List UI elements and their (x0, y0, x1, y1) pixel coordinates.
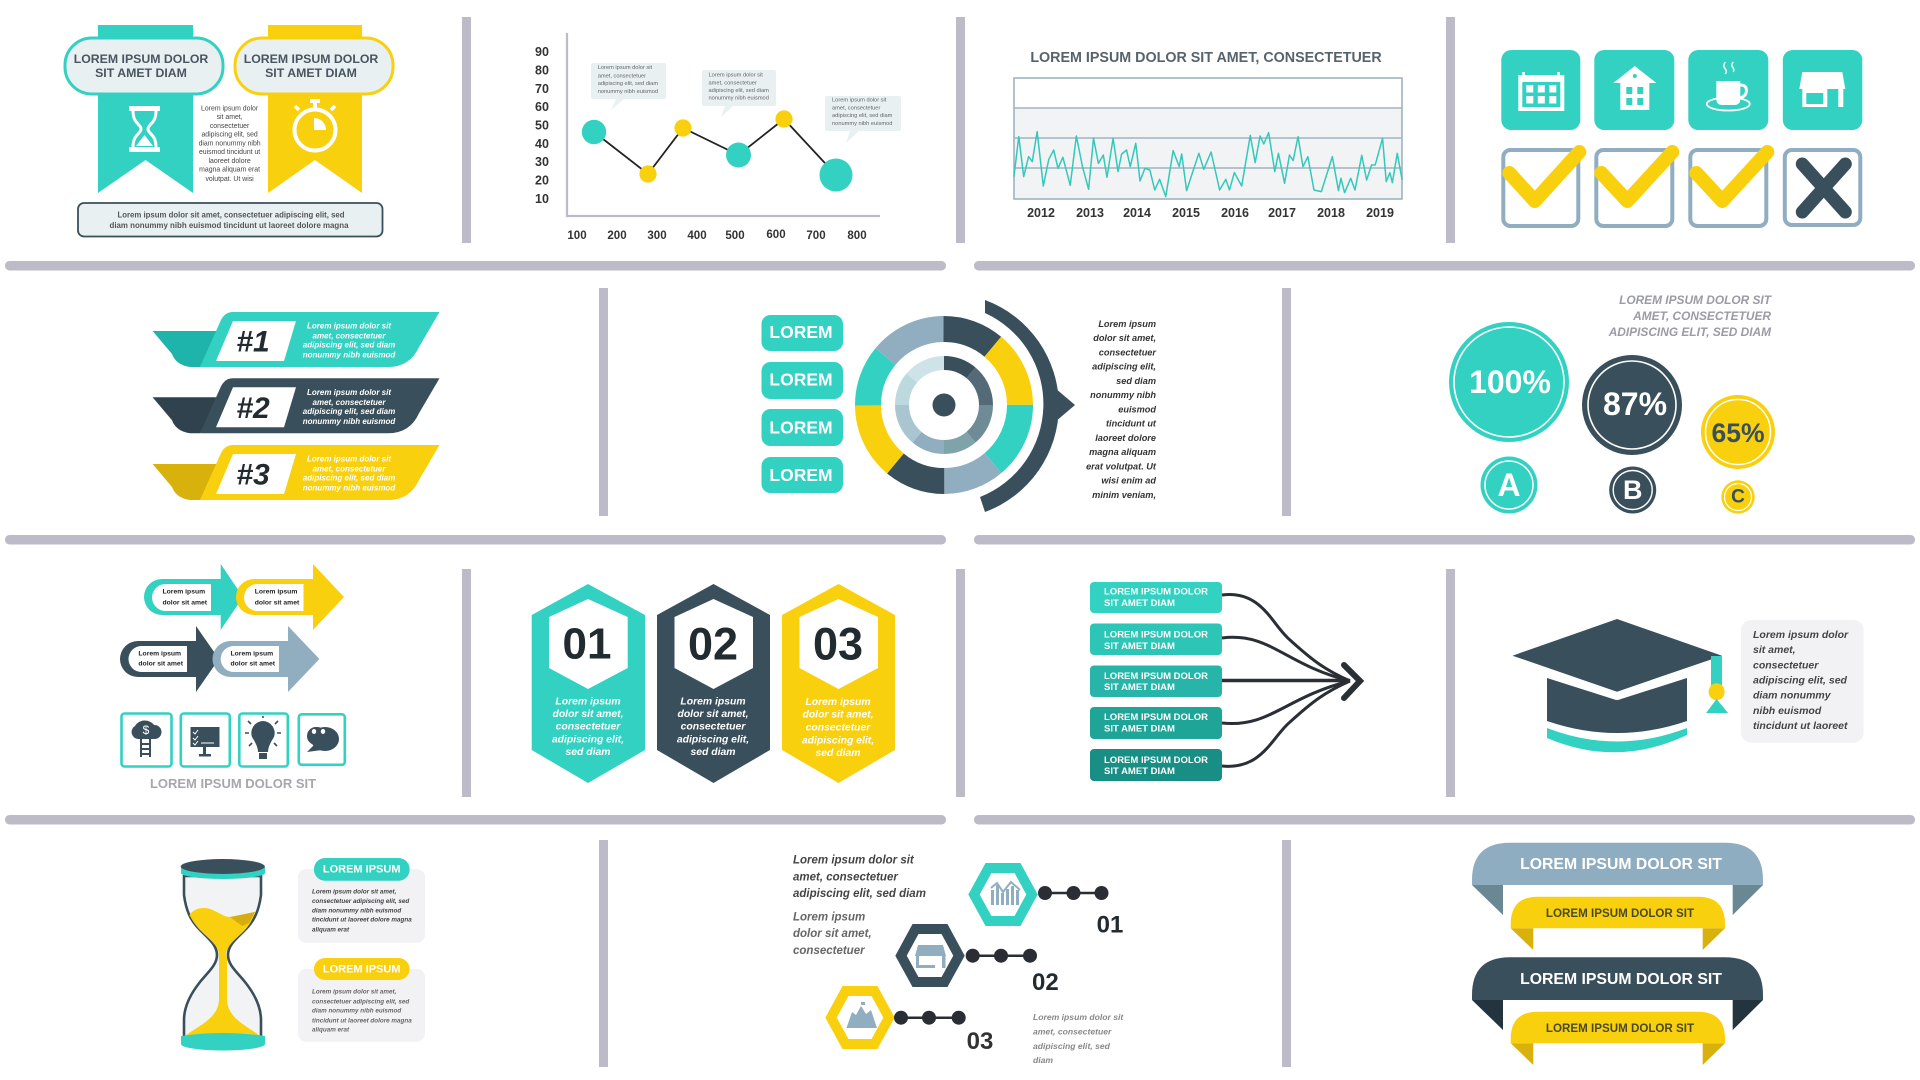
text block: center paragraph: diam nonummy nibh (199, 140, 261, 148)
circle 65%: 65% (1711, 418, 1765, 448)
panel: stacked ribbons (1472, 843, 1763, 1065)
label boxes: LOREM IPSUM DOLOR (1104, 671, 1208, 682)
tile: house (1594, 50, 1674, 130)
teal badge heading (65, 38, 223, 94)
arrow yellow (236, 564, 344, 630)
step 02 (901, 929, 1059, 996)
label buttons: LOREM (769, 418, 833, 438)
text block bottom: amet, consectetuer (1033, 1027, 1112, 1037)
icon: stopwatch (294, 99, 336, 150)
note 1: consectetuer adipiscing elit, sed (312, 898, 409, 905)
callout bubble 2 (702, 70, 776, 117)
note 2: consectetuer adipiscing elit, sed (312, 998, 409, 1006)
hexagon 01: consectetuer (556, 722, 621, 732)
banner 1: nonummy nibh euismod (303, 350, 396, 360)
arrow dark: dolor sit amet (138, 660, 184, 668)
yellow badge heading (235, 38, 393, 94)
icon: hourglass (129, 106, 160, 152)
note card (1741, 620, 1864, 743)
hexagon 01: adipiscing elit, (552, 734, 624, 746)
x axis labels: 600 (766, 229, 786, 241)
letter A (1480, 456, 1538, 514)
text block: adipiscing elit, (1092, 362, 1156, 372)
text block: center paragraph: Lorem ipsum dolor (201, 106, 259, 112)
heading: LOREM IPSUM DOLOR SIT (1619, 293, 1773, 307)
note 2: Lorem ipsum dolor sit amet, (312, 988, 397, 996)
callout bubble 2: amet, consectetuer (708, 80, 757, 86)
note 2 (298, 958, 425, 1042)
label buttons (762, 315, 843, 493)
year labels: 2017 (1268, 206, 1296, 220)
text block: dolor sit amet, (1093, 333, 1156, 343)
text block: erat volutpat. Ut (1086, 462, 1157, 472)
x axis labels: 100 (567, 230, 587, 242)
banner 2: Lorem ipsum dolor sit (307, 388, 391, 397)
banner 1 (153, 312, 440, 367)
hourglass (181, 859, 265, 1050)
arrow teal (144, 564, 243, 630)
text block (1086, 319, 1157, 500)
y axis labels: 70 (535, 82, 549, 96)
panel: percentage circles (1449, 293, 1775, 514)
icon box: board (181, 714, 230, 766)
text block: Lorem ipsum (1098, 319, 1156, 329)
x axis labels: 400 (687, 230, 707, 242)
ribbon yellow 2 (1511, 1012, 1725, 1065)
year labels (1027, 206, 1394, 220)
tile: coffee cup (1688, 50, 1768, 130)
hexagon 03: 03 (813, 618, 863, 670)
text block: center paragraph (199, 106, 261, 183)
arrow dark (120, 626, 219, 692)
year labels: 2018 (1317, 206, 1345, 220)
text block middle: consectetuer (793, 945, 865, 957)
checkbox 2 (1596, 150, 1672, 226)
arrow teal: Lorem ipsum (162, 588, 205, 596)
hexagon 01 (532, 584, 645, 783)
callout: bottom caption (78, 203, 382, 236)
x axis labels: 800 (847, 230, 867, 242)
text block: magna aliquam (1089, 447, 1156, 457)
y axis labels: 10 (535, 192, 549, 206)
teal badge heading: LOREM IPSUM DOLOR (74, 52, 208, 66)
banner 2: adipiscing elit, sed diam (303, 407, 395, 416)
caption: LOREM IPSUM DOLOR SIT (150, 776, 316, 791)
note card: sit amet, (1753, 644, 1796, 656)
callout bubble 1: amet, consectetuer (598, 73, 646, 79)
banner 2: #2 (236, 392, 270, 425)
arrow light blue: Lorem ipsum (230, 650, 273, 658)
line series (1014, 132, 1402, 197)
panel: target diagram (762, 300, 1157, 512)
text block bottom (1033, 1012, 1124, 1065)
hexagon 02 (657, 584, 770, 783)
ribbon light blue: LOREM IPSUM DOLOR SIT (1520, 856, 1722, 873)
letter B: B (1623, 475, 1642, 505)
text block top: amet, consectetuer (793, 871, 898, 883)
x axis labels (567, 229, 867, 242)
text block: wisi enim ad (1101, 476, 1156, 486)
y axis labels: 60 (535, 100, 549, 114)
hexagon 03: consectetuer (806, 722, 871, 734)
callout bubble 3: nonummy nibh euismod (832, 121, 892, 127)
banner 1: Lorem ipsum dolor sit (307, 322, 391, 330)
panel: converging arrow (1090, 582, 1360, 781)
hexagon 02: sed diam (690, 747, 736, 758)
label boxes: LOREM IPSUM DOLOR (1104, 755, 1208, 766)
panel: area line chart (1014, 50, 1402, 220)
icon box: cloud money (122, 714, 172, 766)
callout bubble 2: nonummy nibh euismod (708, 96, 769, 102)
hexagon 03: dolor sit amet, (802, 710, 874, 720)
tile: calendar (1501, 50, 1580, 130)
banner 3: adipiscing elit, sed diam (303, 474, 395, 482)
note 1 (298, 858, 425, 943)
year labels: 2019 (1366, 206, 1394, 220)
note card: adipiscing elit, sed (1753, 674, 1848, 686)
note card: consectetuer (1753, 659, 1819, 671)
label buttons: LOREM (769, 322, 833, 342)
text block: nonummy nibh (1090, 390, 1156, 400)
ribbon light blue (1472, 843, 1763, 915)
note 1: Lorem ipsum dolor sit amet, (312, 888, 397, 896)
callout bubble 3: adipiscing elit, sed diam (832, 113, 893, 119)
panel: ranked banners (153, 312, 440, 500)
letter B (1609, 466, 1656, 514)
banner 2: amet, consectetuer (313, 398, 386, 407)
banner 3: nonummy nibh euismod (303, 484, 396, 492)
hexagon 01: Lorem ipsum (555, 696, 621, 708)
label boxes: LOREM IPSUM DOLOR (1104, 630, 1208, 640)
hexagon 01: sed diam (565, 747, 611, 758)
y axis labels: 20 (535, 174, 549, 188)
hexagon 02: consectetuer (681, 722, 746, 732)
text block: center paragraph: laoreet dolore (209, 158, 251, 165)
label boxes: SIT AMET DIAM (1104, 766, 1175, 777)
label boxes: LOREM IPSUM DOLOR (1104, 586, 1208, 598)
text block: center paragraph: adipiscing elit, sed (201, 132, 258, 138)
banner 1: amet, consectetuer (313, 332, 386, 340)
arrow yellow: dolor sit amet (255, 600, 300, 606)
note 1: tincidunt ut laoreet dolore magna (312, 916, 412, 924)
hexagon 03 (782, 584, 895, 783)
tile: store (1783, 50, 1862, 130)
circle 100%: 100% (1469, 364, 1551, 400)
panel: graduation cap (1512, 619, 1864, 752)
label buttons: LOREM (769, 465, 833, 485)
label boxes: SIT AMET DIAM (1104, 724, 1175, 734)
y axis labels: 90 (535, 45, 549, 59)
icon box: light bulb (239, 714, 288, 766)
callout bubble 1: Lorem ipsum dolor sit (598, 65, 652, 71)
y axis labels (535, 45, 549, 206)
letter C: C (1731, 486, 1745, 508)
text block: euismod (1118, 404, 1156, 414)
callout bubble 3: Lorem ipsum dolor sit (832, 97, 887, 103)
panel: icon tiles and checkboxes (1501, 50, 1862, 226)
step 01: 01 (1097, 912, 1123, 938)
note 2: diam nonummy nibh euismod (312, 1008, 401, 1014)
callout bubble 1: adipiscing elit, sed diam (598, 81, 658, 87)
letter A: A (1497, 467, 1521, 503)
label boxes: LOREM IPSUM DOLOR (1104, 712, 1208, 723)
icon box: cloud money: $ (143, 723, 150, 737)
heading: AMET, CONSECTETUER (1632, 309, 1771, 323)
note card: tincidunt ut laoreet (1753, 720, 1848, 732)
center dot (932, 394, 956, 416)
arrow head (1344, 665, 1360, 698)
hexagon 02: adipiscing elit, (677, 734, 749, 746)
text block: consectetuer (1099, 348, 1156, 358)
ribbon dark (1472, 957, 1763, 1030)
chart frame (1014, 78, 1402, 199)
text block middle: dolor sit amet, (793, 928, 872, 940)
y axis labels: 50 (535, 118, 549, 132)
hexagon 01: 01 (563, 620, 611, 668)
callout bubble 3: amet, consectetuer (832, 105, 880, 111)
label boxes: SIT AMET DIAM (1104, 682, 1175, 693)
panel: hourglass with notes (181, 858, 425, 1050)
callout bubble 3 (825, 96, 901, 143)
hexagon 02: Lorem ipsum (680, 696, 746, 708)
circle 87%: 87% (1603, 386, 1667, 422)
text block: laoreet dolore (1095, 433, 1156, 443)
note card: diam nonummy (1753, 690, 1832, 702)
banner 2 (153, 378, 440, 433)
y axis labels: 40 (535, 137, 549, 151)
cap icon (1512, 619, 1728, 752)
text block: center paragraph: volutpat. Ut wisi (205, 176, 254, 183)
outer arc arrow (980, 300, 1075, 512)
ribbon yellow 1 (1511, 897, 1725, 950)
inner ring (902, 363, 986, 447)
text block: center paragraph: sit amet, (217, 114, 243, 121)
step 03: 03 (967, 1028, 993, 1055)
note card: Lorem ipsum dolor (1753, 629, 1849, 641)
callout: bottom caption: Lorem ipsum dolor sit amet, consectetuer adipiscing elit, sed (117, 210, 345, 220)
checkbox 3 (1690, 150, 1767, 226)
text block: minim veniam, (1092, 490, 1156, 500)
banner 1: #1 (236, 326, 270, 358)
text block bottom: adipiscing elit, sed (1033, 1041, 1111, 1051)
text block: sed diam (1116, 376, 1156, 386)
note 2: LOREM IPSUM (323, 964, 401, 976)
circle 87% (1582, 355, 1682, 455)
yellow ribbon (268, 25, 362, 193)
text block bottom: diam (1033, 1055, 1053, 1065)
ribbon yellow 2: LOREM IPSUM DOLOR SIT (1546, 1022, 1694, 1035)
hexagon 02: 02 (688, 618, 738, 670)
ribbon yellow 1: LOREM IPSUM DOLOR SIT (1546, 907, 1694, 920)
arrow light blue: dolor sit amet (230, 660, 276, 668)
year labels: 2012 (1027, 206, 1055, 220)
teal ribbon (98, 25, 193, 193)
arrow dark: Lorem ipsum (138, 650, 181, 658)
note 2: aliquam erat (312, 1026, 350, 1034)
panel: line chart with bubbles (535, 33, 901, 242)
note 1: diam nonummy nibh euismod (312, 908, 401, 914)
data points (582, 110, 852, 192)
yellow badge heading: LOREM IPSUM DOLOR (244, 52, 378, 66)
text block: tincidunt ut (1106, 419, 1157, 429)
x axis labels: 200 (607, 230, 627, 242)
x axis labels: 300 (647, 230, 667, 242)
callout bubble 2: adipiscing elit, sed diam (708, 88, 769, 94)
text block: center paragraph: magna aliquam erat (199, 166, 260, 174)
text block top: adipiscing elit, sed diam (793, 888, 926, 900)
label buttons: LOREM (769, 370, 833, 390)
letter C (1721, 480, 1755, 514)
label boxes: SIT AMET DIAM (1104, 598, 1175, 609)
callout bubble 1 (591, 63, 666, 110)
banner 1: adipiscing elit, sed diam (303, 340, 395, 350)
step 02: 02 (1032, 969, 1059, 996)
x axis labels: 700 (806, 230, 826, 242)
panel: arrows and icon boxes (120, 564, 345, 791)
text block middle: Lorem ipsum (793, 912, 865, 924)
hexagon 03: Lorem ipsum (805, 697, 871, 708)
banner 3: Lorem ipsum dolor sit (307, 454, 391, 464)
year labels: 2013 (1076, 206, 1104, 220)
y axis labels: 80 (535, 64, 549, 78)
data line (594, 119, 836, 175)
x axis labels: 500 (725, 230, 745, 242)
banner 3: amet, consectetuer (313, 464, 386, 474)
note 2: tincidunt ut laoreet dolore magna (312, 1018, 412, 1024)
text block: center paragraph: consectetuer (210, 123, 250, 130)
year labels: 2016 (1221, 206, 1249, 220)
yellow badge heading: SIT AMET DIAM (265, 66, 357, 80)
ribbon dark: LOREM IPSUM DOLOR SIT (1520, 971, 1722, 988)
step 03 (831, 991, 993, 1055)
chart title: LOREM IPSUM DOLOR SIT AMET, CONSECTETUER (1030, 50, 1382, 66)
checkbox 1 (1503, 150, 1579, 226)
y axis labels: 30 (535, 155, 549, 169)
outer ring (868, 329, 1020, 481)
teal badge heading: SIT AMET DIAM (95, 66, 187, 80)
heading (1608, 293, 1773, 339)
step 01 (974, 868, 1123, 938)
panel: hexagon timeline (793, 855, 1124, 1065)
label boxes: SIT AMET DIAM (1104, 641, 1175, 652)
icon box: chat (299, 714, 345, 765)
hexagon 01: dolor sit amet, (552, 709, 624, 720)
banner 3 (153, 445, 440, 500)
note 1: LOREM IPSUM (323, 864, 401, 876)
text block top (793, 855, 926, 900)
panel: numbered hexagons (532, 584, 895, 783)
year labels: 2014 (1123, 206, 1151, 220)
circle 65% (1701, 395, 1775, 469)
callout bubble 2: Lorem ipsum dolor sit (708, 72, 763, 78)
hexagon 03: adipiscing elit, (802, 736, 874, 746)
banner 2: nonummy nibh euismod (303, 417, 396, 426)
hexagon 03: sed diam (815, 748, 861, 759)
panel: twin ribbon badges (65, 25, 393, 236)
label boxes (1090, 582, 1222, 781)
circle 100% (1449, 322, 1569, 442)
arrow teal: dolor sit amet (162, 600, 208, 606)
callout bubble 1: nonummy nibh euismod (598, 89, 658, 95)
text block: center paragraph: euismod tincidunt ut (199, 149, 260, 156)
axes (567, 33, 880, 216)
text block top: Lorem ipsum dolor sit (793, 855, 915, 867)
hexagon 02: dolor sit amet, (677, 709, 749, 720)
arrow light blue (212, 626, 319, 692)
connector lines (1222, 595, 1350, 766)
text block middle (793, 912, 872, 957)
note 1: aliquam erat (312, 926, 350, 934)
checkbox with X (1785, 150, 1860, 225)
banner 3: #3 (236, 458, 270, 492)
note card: nibh euismod (1753, 705, 1822, 717)
text block bottom: Lorem ipsum dolor sit (1033, 1012, 1124, 1022)
year labels: 2015 (1172, 206, 1200, 220)
callout: bottom caption: diam nonummy nibh euismod tincidunt ut laoreet dolore magna (110, 221, 349, 230)
arrow yellow: Lorem ipsum (255, 588, 297, 596)
heading: ADIPISCING ELIT, SED DIAM (1608, 325, 1772, 339)
